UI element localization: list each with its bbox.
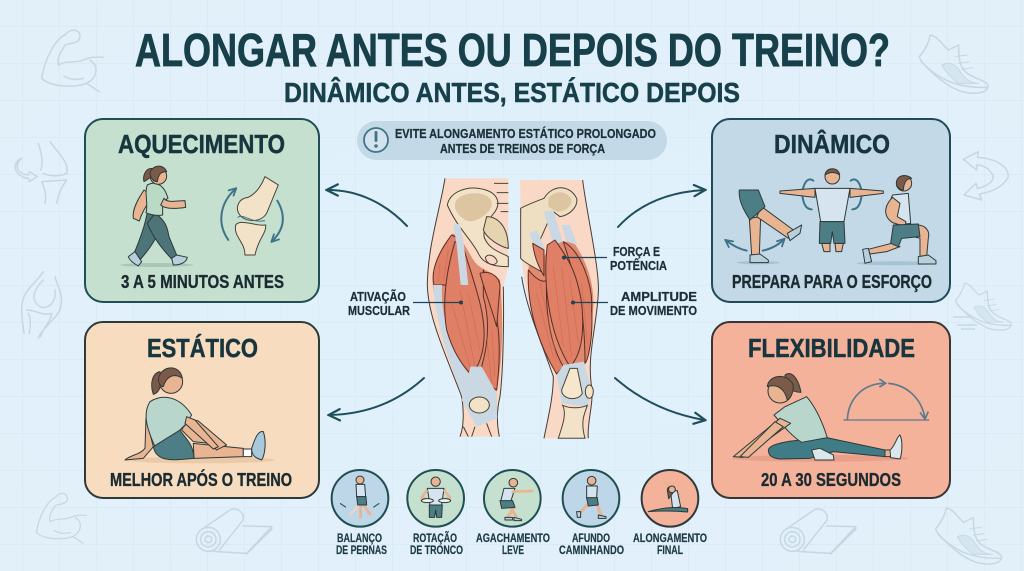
warning text [395,126,656,156]
chart: left leg anatomy [427,178,508,437]
caption: PREPARA PARA O ESFORÇO [732,272,932,292]
icon: knee joint with rotation arrows [221,177,283,255]
exercise: alongamento final [633,470,707,557]
heading: aquecimento: AQUECIMENTO [118,129,285,159]
panel: flexibilidade [712,322,950,498]
exercise: alongamento final: ALONGAMENTO [633,533,707,545]
background icon: flexed arm top left [42,30,103,92]
exercise: rotacao de tronco: ROTAÇÃO [413,532,457,545]
arrow: to estatico [330,378,424,415]
exercise: agachamento leve [476,470,550,557]
exercise: agachamento leve: AGACHAMENTO [476,533,550,545]
label: forca e potencia [562,244,668,273]
arrow: to dinamico [618,190,704,227]
background icon: knee [22,272,62,338]
exercise: balanco de pernas: BALANÇO [337,533,382,545]
label: amplitude de movimento [571,289,697,318]
background icon: joint with arrow [15,142,67,203]
caption: 3 A 5 MINUTOS ANTES [121,272,284,292]
icon: range of motion arc [843,379,929,420]
exercise: afundo caminhando: CAMINHANDO [559,545,624,557]
background icon: sneaker top right [919,35,988,93]
chart: right leg anatomy [520,180,598,438]
exercise: agachamento leve: LEVE [502,545,524,557]
label: forca e potencia: FORÇA E [613,244,660,259]
icon: exclamation [364,128,388,152]
warning text: ANTES DE TREINOS DE FORÇA [440,141,606,156]
figure: walking woman [120,166,193,267]
subtitle: DINÂMICO ANTES, ESTÁTICO DEPOIS [284,77,740,108]
exercise: afundo caminhando [559,470,624,557]
panel: aquecimento [85,119,319,302]
background icon: swap arrows [963,152,1008,200]
figure: forward bend stretch [732,374,908,462]
figure: seated stretch [125,368,275,463]
figure: trunk rotation [780,169,883,252]
exercise: balanco de pernas [332,470,388,557]
exercise: alongamento final: FINAL [657,545,683,557]
caption: MELHOR APÓS O TREINO [110,469,292,490]
exercise: rotacao de tronco: DE TRONCO [410,545,463,557]
label: amplitude de movimento: AMPLITUDE [621,289,697,304]
background icon: flexed arm bottom left [36,493,86,543]
panel: estatico [85,322,319,498]
figure: lunge [857,176,937,265]
label: forca e potencia: POTÊNCIA [610,258,668,273]
label: ativacao muscular [348,289,463,318]
background icon: running sneaker [953,283,1011,330]
arrow: to flexibilidade [615,378,704,420]
arrow: to aquecimento [328,190,407,226]
warning callout [357,121,667,160]
panel: dinamico [712,119,950,302]
exercise: balanco de pernas: DE PERNAS [336,545,387,557]
heading: dinamico: DINÂMICO [774,129,890,159]
heading: estatico: ESTÁTICO [147,333,258,363]
figure: leg swing [727,190,802,264]
heading: flexibilidade: FLEXIBILIDADE [748,333,915,363]
background icon: sneaker bottom right [936,508,1002,564]
label: amplitude de movimento: DE MOVIMENTO [610,303,697,318]
caption: 20 A 30 SEGUNDOS [761,470,901,490]
warning text: EVITE ALONGAMENTO ESTÁTICO PROLONGADO [395,126,656,141]
background icon: yoga mat left [196,509,272,554]
label: ativacao muscular: MUSCULAR [348,303,411,318]
label: ativacao muscular: ATIVAÇÃO [350,289,406,304]
exercise: rotacao de tronco [407,470,464,557]
background icon: yoga mat right [780,509,856,554]
exercise: afundo caminhando: AFUNDO [572,533,610,545]
